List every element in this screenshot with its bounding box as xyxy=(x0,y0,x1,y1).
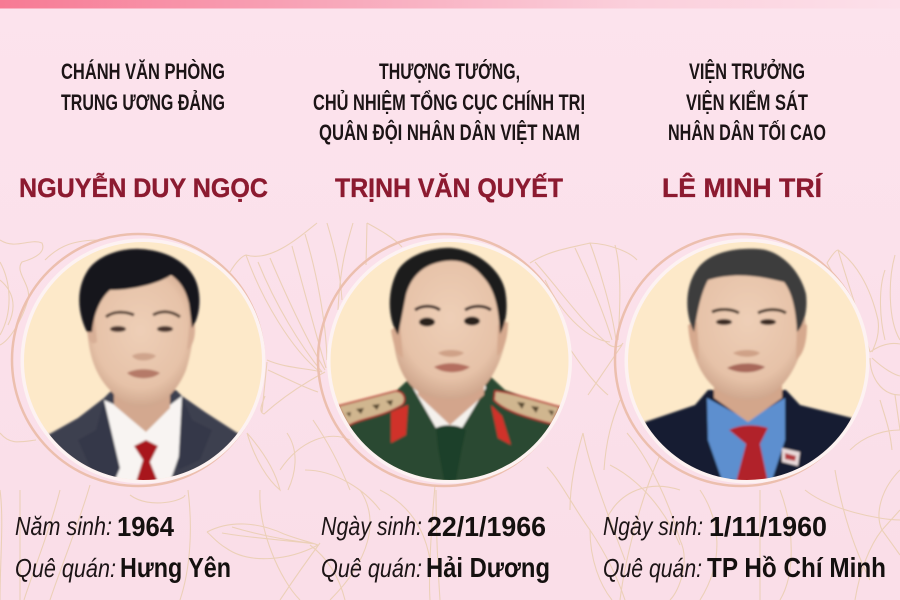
birth date: 22/1/1966 xyxy=(427,511,546,542)
background lotus line art xyxy=(0,223,900,600)
hometown: Quê quán: xyxy=(321,553,422,583)
top gradient band xyxy=(0,0,900,8)
name: LÊ MINH TRÍ xyxy=(662,172,823,203)
birth date xyxy=(321,511,546,542)
panel: Nguyễn Duy Ngọc xyxy=(12,59,268,583)
name: TRỊNH VĂN QUYẾT xyxy=(335,172,563,203)
hometown: Quê quán: xyxy=(15,553,116,583)
role heading: TRUNG ƯƠNG ĐẢNG xyxy=(61,90,225,115)
hometown xyxy=(15,552,231,583)
role heading: VIỆN TRƯỞNG xyxy=(689,59,805,84)
portrait xyxy=(615,234,870,490)
hometown xyxy=(603,552,886,583)
birth date: Ngày sinh: xyxy=(603,511,703,541)
hometown xyxy=(321,552,550,583)
name: NGUYỄN DUY NGỌC xyxy=(19,172,268,203)
role heading xyxy=(61,59,225,115)
panel: Lê Minh Trí xyxy=(603,59,886,583)
hometown: Quê quán: xyxy=(603,553,702,583)
role heading xyxy=(668,59,826,145)
hometown: Hải Dương xyxy=(426,552,550,583)
role heading: QUÂN ĐỘI NHÂN DÂN VIỆT NAM xyxy=(319,120,580,145)
birth date: 1/11/1960 xyxy=(709,511,827,542)
birth year: 1964 xyxy=(117,511,174,542)
birth year: Năm sinh: xyxy=(15,511,112,541)
role heading: CHÁNH VĂN PHÒNG xyxy=(61,59,225,84)
portrait xyxy=(12,234,266,490)
birth date: Ngày sinh: xyxy=(321,511,422,541)
panel: Trịnh Văn Quyết xyxy=(313,59,585,583)
hometown: Hưng Yên xyxy=(120,552,231,583)
role heading: VIỆN KIỂM SÁT xyxy=(686,90,808,115)
role heading: THƯỢNG TƯỚNG, xyxy=(379,59,520,84)
role heading xyxy=(313,59,585,145)
birth date xyxy=(603,511,827,542)
role heading: CHỦ NHIỆM TỔNG CỤC CHÍNH TRỊ xyxy=(313,90,585,115)
portrait xyxy=(318,234,572,490)
role heading: NHÂN DÂN TỐI CAO xyxy=(668,119,826,145)
